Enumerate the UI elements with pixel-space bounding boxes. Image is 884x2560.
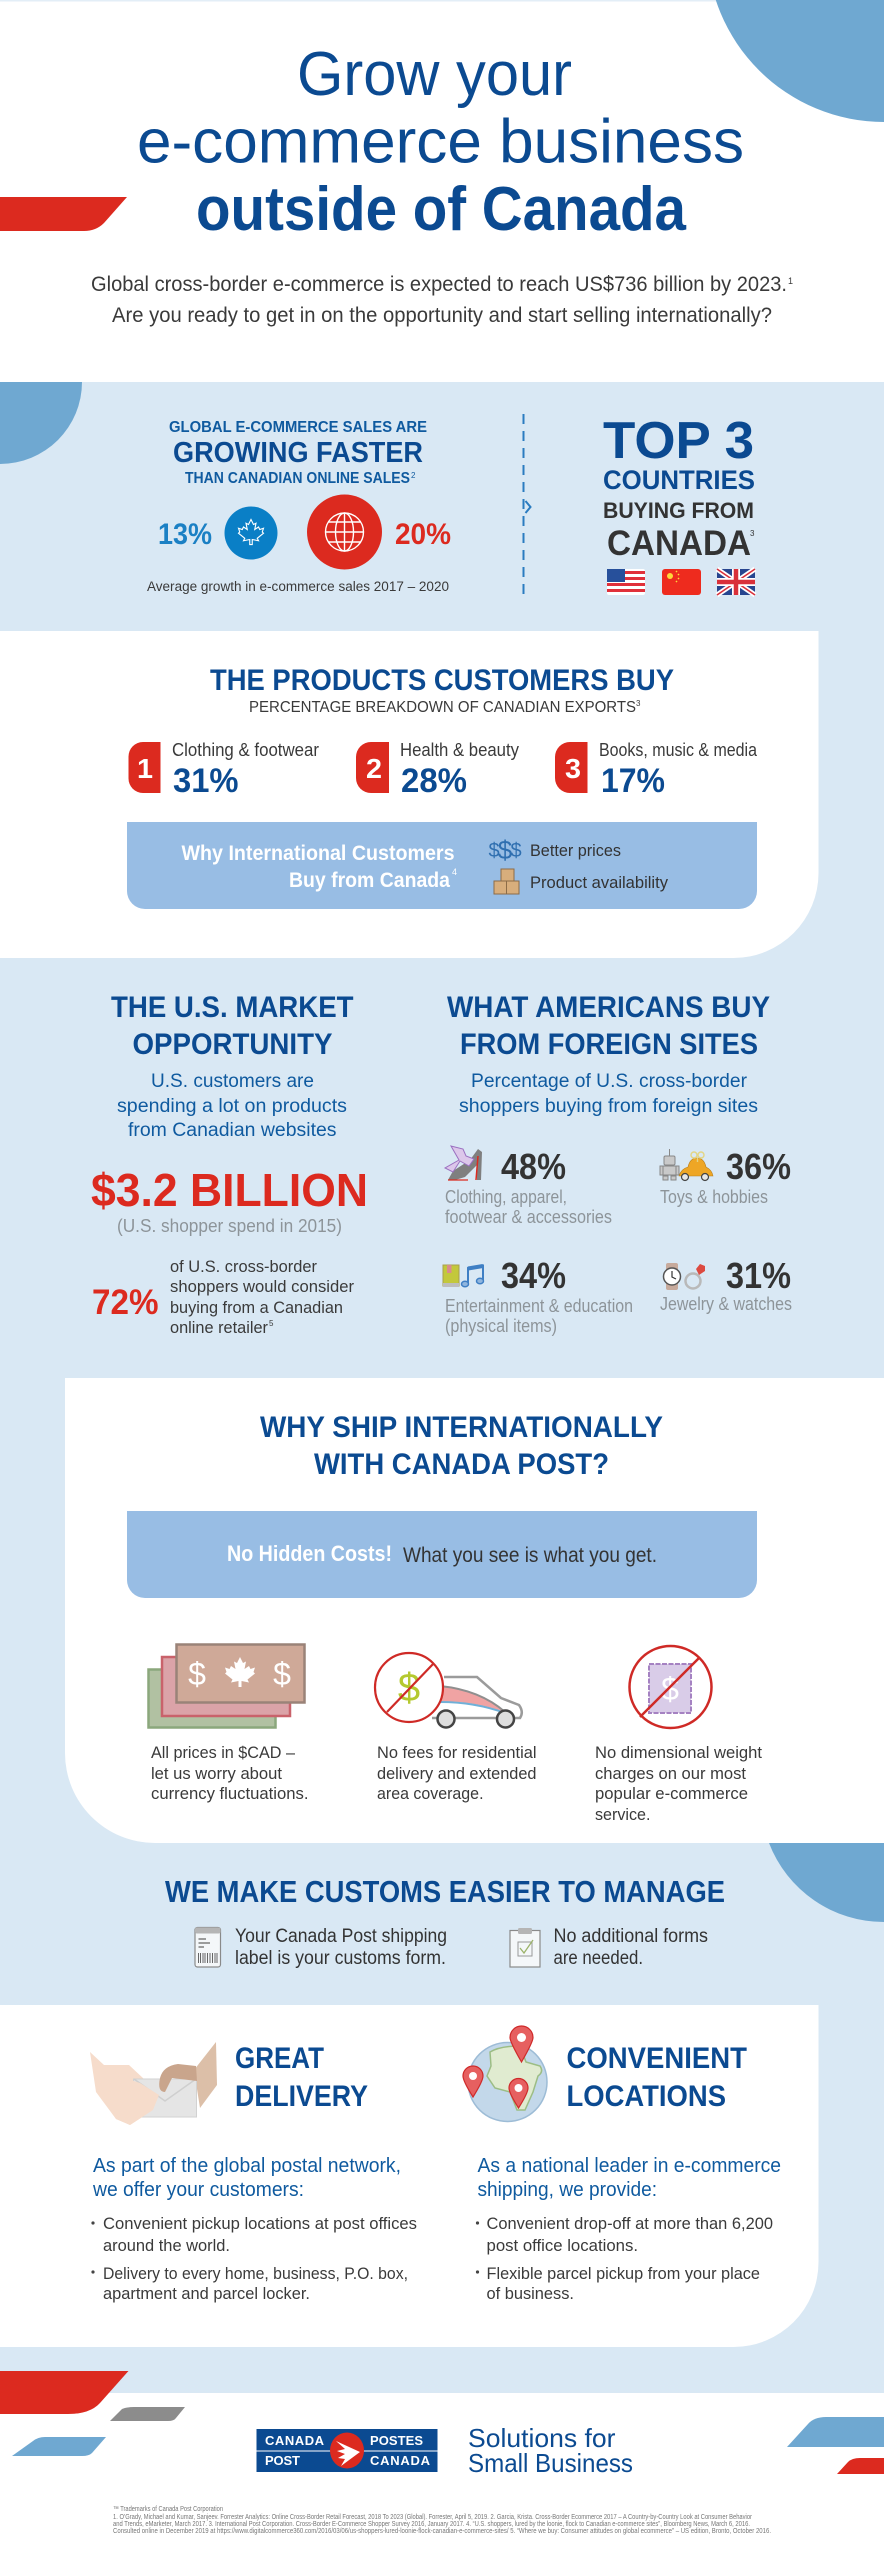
Canada Post logo: CANADA: [265, 2433, 325, 2448]
bullet list: locations: post office locations.: [486, 2236, 638, 2255]
text block: locations intro: shipping, we provide:: [478, 2179, 657, 2201]
big stat: 3.2 billion: $3.2 BILLION: [91, 1164, 368, 1216]
great delivery heading: DELIVERY: [235, 2080, 368, 2113]
callout: why international customers: [127, 822, 757, 909]
benefit text: dimensional weight: [595, 1743, 762, 1824]
convenient locations heading: LOCATIONS: [566, 2080, 726, 2113]
top 3 heading: TOP 3: [603, 412, 754, 470]
growth heading: THAN CANADIAN ONLINE SALES: [185, 470, 410, 487]
customs heading: WE MAKE CUSTOMS EASIER TO MANAGE: [165, 1874, 725, 1909]
icon: stamp with no symbol: [630, 1646, 712, 1728]
customs text: label: Your Canada Post shipping: [235, 1926, 447, 1947]
bullet list: locations: [476, 2214, 773, 2303]
stat: toys: Toys & hobbies: [660, 1187, 768, 1207]
product 2: 28%: [401, 762, 467, 800]
market subtext: spending a lot on products: [117, 1096, 347, 1117]
stat caption: (U.S. shopper spend in 2015): [117, 1216, 342, 1236]
product 1: 1: [137, 753, 153, 784]
icon: clipboard: [510, 1928, 540, 1967]
product 3: [555, 740, 758, 800]
stat: clothing: footwear & accessories: [445, 1207, 612, 1227]
benefit text: dimensional weight: popular e-commerce: [595, 1784, 748, 1803]
icon: dollar signs: [488, 835, 522, 865]
convenient locations heading: [566, 2042, 747, 2113]
icon: watch and ring: [664, 1263, 705, 1290]
stat: entertainment: Entertainment & education: [445, 1296, 633, 1316]
stat: 72 percent: 72%: [92, 1283, 158, 1322]
bullet list: locations: Flexible parcel pickup from your place: [486, 2264, 760, 2283]
stat text: 5: [269, 1319, 274, 1328]
stat text: of U.S. cross-border: [170, 1257, 317, 1276]
growth heading: GLOBAL E-COMMERCE SALES ARE: [169, 419, 427, 436]
icon: robot and toy car: [660, 1149, 713, 1180]
great delivery heading: [235, 2042, 368, 2113]
customs text: label: [235, 1926, 447, 1969]
bullet list: delivery: Convenient pickup locations at post offices: [103, 2214, 417, 2233]
benefit text: prices: [151, 1743, 308, 1803]
callout: why international customers: Product availability: [530, 873, 668, 892]
stat: entertainment: 34%: [501, 1255, 566, 1296]
top 3 heading: CANADA: [607, 524, 751, 563]
intro text: Global cross-border e-commerce is expected to reach US$736 billion by 2023.: [91, 273, 787, 296]
footnotes: Consulted online in December 2019 at https://www.digitalcommerce360.com/2016/03/06/us-shoppers-lured-loonie-flock-canadian-e-commerce-sites/ 5. “Where we buy: Consumer attitudes on global ecommerce” – US edition, Bronto, October 2016.: [113, 2528, 771, 2535]
convenient locations heading: CONVENIENT: [566, 2042, 747, 2075]
product 3: 17%: [601, 762, 665, 800]
icon: book and music note: [443, 1265, 484, 1287]
benefit text: prices: let us worry about: [151, 1764, 282, 1783]
icon: shoe and bow: [445, 1146, 482, 1180]
growth heading: [169, 419, 427, 487]
product 2: 2: [366, 753, 382, 784]
market subtext: U.S. customers are: [151, 1071, 314, 1092]
benefit text: dimensional weight: No dimensional weight: [595, 1743, 762, 1762]
tagline: [468, 2423, 633, 2478]
Canada Post logo: CANADA: [370, 2453, 431, 2468]
benefit text: residential delivery: delivery and extended: [377, 1764, 536, 1783]
product 2: [356, 740, 519, 800]
text block: delivery intro: we offer your customers:: [92, 2179, 304, 2201]
top 3 heading: COUNTRIES: [603, 465, 755, 495]
footnotes: 1. O’Grady, Michael and Kumar, Sanjeev. Forrester Analytics: Online Cross-Border Retail Forecast, 2018 To 2023 (Global). Forrester, April 5, 2019. 2. Garcia, Krista. Cross-Border Ecommerce 2017 – A Country-by-Country Look at Consumer Behavior: [113, 2514, 753, 2521]
panel: top 3 countries: [603, 412, 755, 595]
benefit text: prices: All prices in $CAD –: [151, 1743, 296, 1762]
title: Grow your: [297, 40, 572, 109]
tagline: Small Business: [468, 2448, 633, 2478]
panel: customs: [165, 1874, 725, 1969]
stat text: [170, 1257, 354, 1337]
panel: delivery and locations: [0, 2005, 818, 2347]
tagline: Solutions for: [468, 2423, 616, 2453]
stat text: shoppers would consider: [170, 1277, 354, 1296]
stat: entertainment: [445, 1255, 633, 1336]
Canada Post logo: [256, 2429, 438, 2472]
growth heading: 2: [411, 471, 416, 480]
stat: jewelry: 31%: [726, 1255, 791, 1296]
icon: China flag: [662, 569, 701, 595]
decorative circle behind customs section: [769, 1843, 884, 1922]
Americans subtext: shoppers buying from foreign sites: [459, 1096, 758, 1117]
product 3: 3: [565, 753, 581, 784]
customs text: no forms: No additional forms: [554, 1926, 708, 1947]
Americans subtext: Percentage of U.S. cross-border: [471, 1071, 748, 1092]
callout: no hidden costs: No Hidden Costs!: [227, 1541, 392, 1566]
callout: no hidden costs: [127, 1511, 757, 1598]
growth caption: Average growth in e-commerce sales 2017 – 2020: [147, 579, 449, 594]
products heading: [210, 664, 674, 716]
panel: U.S. market opportunity: [91, 991, 368, 1337]
intro text: 1: [788, 276, 793, 286]
icon: delivery car with no dollar sign: $: [398, 1666, 420, 1710]
callout: why international customers: Buy from Canada: [289, 869, 450, 892]
customs text: no forms: [554, 1926, 708, 1969]
customs text: label: label is your customs form.: [235, 1948, 446, 1969]
icon: canada circle: [224, 506, 278, 560]
why ship heading: [260, 1411, 663, 1481]
icon: shipping label: [195, 1928, 220, 1967]
intro text: [91, 273, 793, 327]
panel: why ship with Canada Post: [65, 1378, 884, 1843]
market subtext: [117, 1071, 347, 1141]
panel: products customers buy: [0, 631, 818, 958]
Americans heading: WHAT AMERICANS BUY: [447, 991, 770, 1024]
icon: banknotes: $: [188, 1656, 206, 1692]
market heading: THE U.S. MARKET: [111, 991, 354, 1024]
icon: delivery car with no dollar sign: [375, 1653, 522, 1728]
callout: why international customers: 4: [452, 867, 457, 877]
panel: what Americans buy: [443, 991, 792, 1336]
intro text: Are you ready to get in on the opportunity and start selling internationally?: [112, 304, 772, 327]
text block: delivery intro: [92, 2155, 401, 2201]
icon: UK flag: [717, 569, 755, 595]
products heading: 3: [636, 699, 641, 708]
Canada Post logo: POST: [265, 2453, 300, 2468]
callout: why international customers: Better prices: [530, 841, 621, 860]
icon: hands passing envelope: [90, 2042, 217, 2125]
title: outside of Canada: [196, 175, 686, 244]
Americans subtext: [459, 1071, 758, 1117]
panel: global growth: [147, 419, 451, 594]
icon: dollar signs: $: [498, 835, 513, 865]
top 3 heading: 3: [750, 529, 755, 538]
market heading: [111, 991, 354, 1061]
product 1: Clothing & footwear: [172, 740, 319, 760]
products heading: THE PRODUCTS CUSTOMERS BUY: [210, 664, 674, 697]
icon: US flag: [607, 569, 645, 595]
stat: toys: 36%: [726, 1146, 791, 1187]
icon: banknotes: $: [273, 1656, 291, 1692]
product 3: Books, music & media: [599, 740, 758, 760]
icon: parcels: [494, 869, 519, 894]
customs text: no forms: are needed.: [554, 1948, 643, 1969]
icon: dollar signs: $: [510, 840, 522, 862]
stat: clothing: 48%: [501, 1146, 566, 1187]
top 3 heading: [603, 412, 755, 563]
stat text: online retailer: [170, 1318, 268, 1337]
market heading: OPPORTUNITY: [132, 1028, 332, 1061]
callout: no hidden costs: What you see is what you get.: [403, 1544, 657, 1567]
Canada Post logo: POSTES: [370, 2433, 423, 2448]
light blue background band: [0, 382, 884, 2393]
benefit text: residential delivery: area coverage.: [377, 1784, 484, 1803]
footer: [0, 2371, 884, 2535]
Americans heading: [447, 991, 770, 1061]
footnotes: ™ Trademarks of Canada Post Corporation: [113, 2506, 223, 2513]
decorative quarter circle: [0, 382, 82, 464]
bullet list: locations: of business.: [486, 2284, 574, 2303]
products heading: PERCENTAGE BREAKDOWN OF CANADIAN EXPORTS: [249, 699, 636, 716]
product 1: 31%: [173, 762, 238, 800]
dashed divider with arrow: [524, 414, 530, 597]
hero section: [0, 0, 884, 327]
benefit text: prices: currency fluctuations.: [151, 1784, 308, 1803]
red speed stripe: [0, 197, 127, 231]
product 2: Health & beauty: [400, 740, 519, 760]
bullet list: delivery: Delivery to every home, business, P.O. box,: [103, 2264, 408, 2283]
icon: banknotes: [148, 1644, 304, 1728]
callout: why international customers: Why International Customers: [182, 842, 454, 865]
product 1: [128, 740, 319, 800]
stat: clothing: Clothing, apparel,: [445, 1187, 567, 1207]
top 3 heading: BUYING FROM: [603, 498, 754, 523]
benefit text: dimensional weight: charges on our most: [595, 1764, 746, 1783]
why ship heading: WITH CANADA POST?: [314, 1448, 609, 1481]
footnotes: [113, 2506, 771, 2535]
stat: clothing: [445, 1146, 612, 1227]
icon: stamp with no symbol: $: [661, 1671, 679, 1707]
footnotes: and Trends, eMarketer, March 2017. 3. International Post Corporation. Cross-Border E-Commerce Shopper Survey 2016, January 2017. 4. “U.S. shoppers, lured by the loonie, flock to Canadian e-commerce sites”, Bloomberg News, March 6, 2016.: [113, 2521, 750, 2528]
icon: globe circle: [307, 494, 382, 570]
icon: dollar signs: $: [488, 840, 500, 862]
benefit text: residential delivery: [377, 1743, 536, 1803]
great delivery heading: GREAT: [235, 2042, 324, 2075]
title: [137, 40, 744, 244]
bullet list: delivery: [91, 2214, 417, 2303]
why ship heading: WHY SHIP INTERNATIONALLY: [260, 1411, 663, 1444]
title: e-commerce business: [137, 108, 744, 176]
text block: locations intro: [478, 2155, 781, 2201]
stat: entertainment: (physical items): [445, 1316, 557, 1336]
icon: globe with pins: [463, 2026, 547, 2122]
stat: jewelry: Jewelry & watches: [660, 1294, 792, 1314]
20 percent: 20%: [395, 518, 451, 551]
stat text: buying from a Canadian: [170, 1298, 343, 1317]
Americans heading: FROM FOREIGN SITES: [460, 1028, 758, 1061]
decorative stripes: [0, 2371, 884, 2474]
benefit text: residential delivery: No fees for residential: [377, 1743, 536, 1762]
bullet list: delivery: around the world.: [103, 2236, 230, 2255]
text block: delivery intro: As part of the global postal network,: [93, 2155, 401, 2177]
text block: locations intro: As a national leader in e-commerce: [478, 2155, 781, 2177]
decorative blue circle top right: [707, 0, 884, 122]
bullet list: locations: Convenient drop-off at more than 6,200: [486, 2214, 773, 2233]
13 percent: 13%: [158, 518, 212, 551]
growth heading: GROWING FASTER: [173, 437, 423, 469]
bullet list: delivery: apartment and parcel locker.: [103, 2284, 310, 2303]
stat: jewelry: [660, 1255, 792, 1314]
market subtext: from Canadian websites: [128, 1120, 336, 1141]
benefit text: dimensional weight: service.: [595, 1805, 650, 1824]
stat: toys: [660, 1146, 791, 1207]
